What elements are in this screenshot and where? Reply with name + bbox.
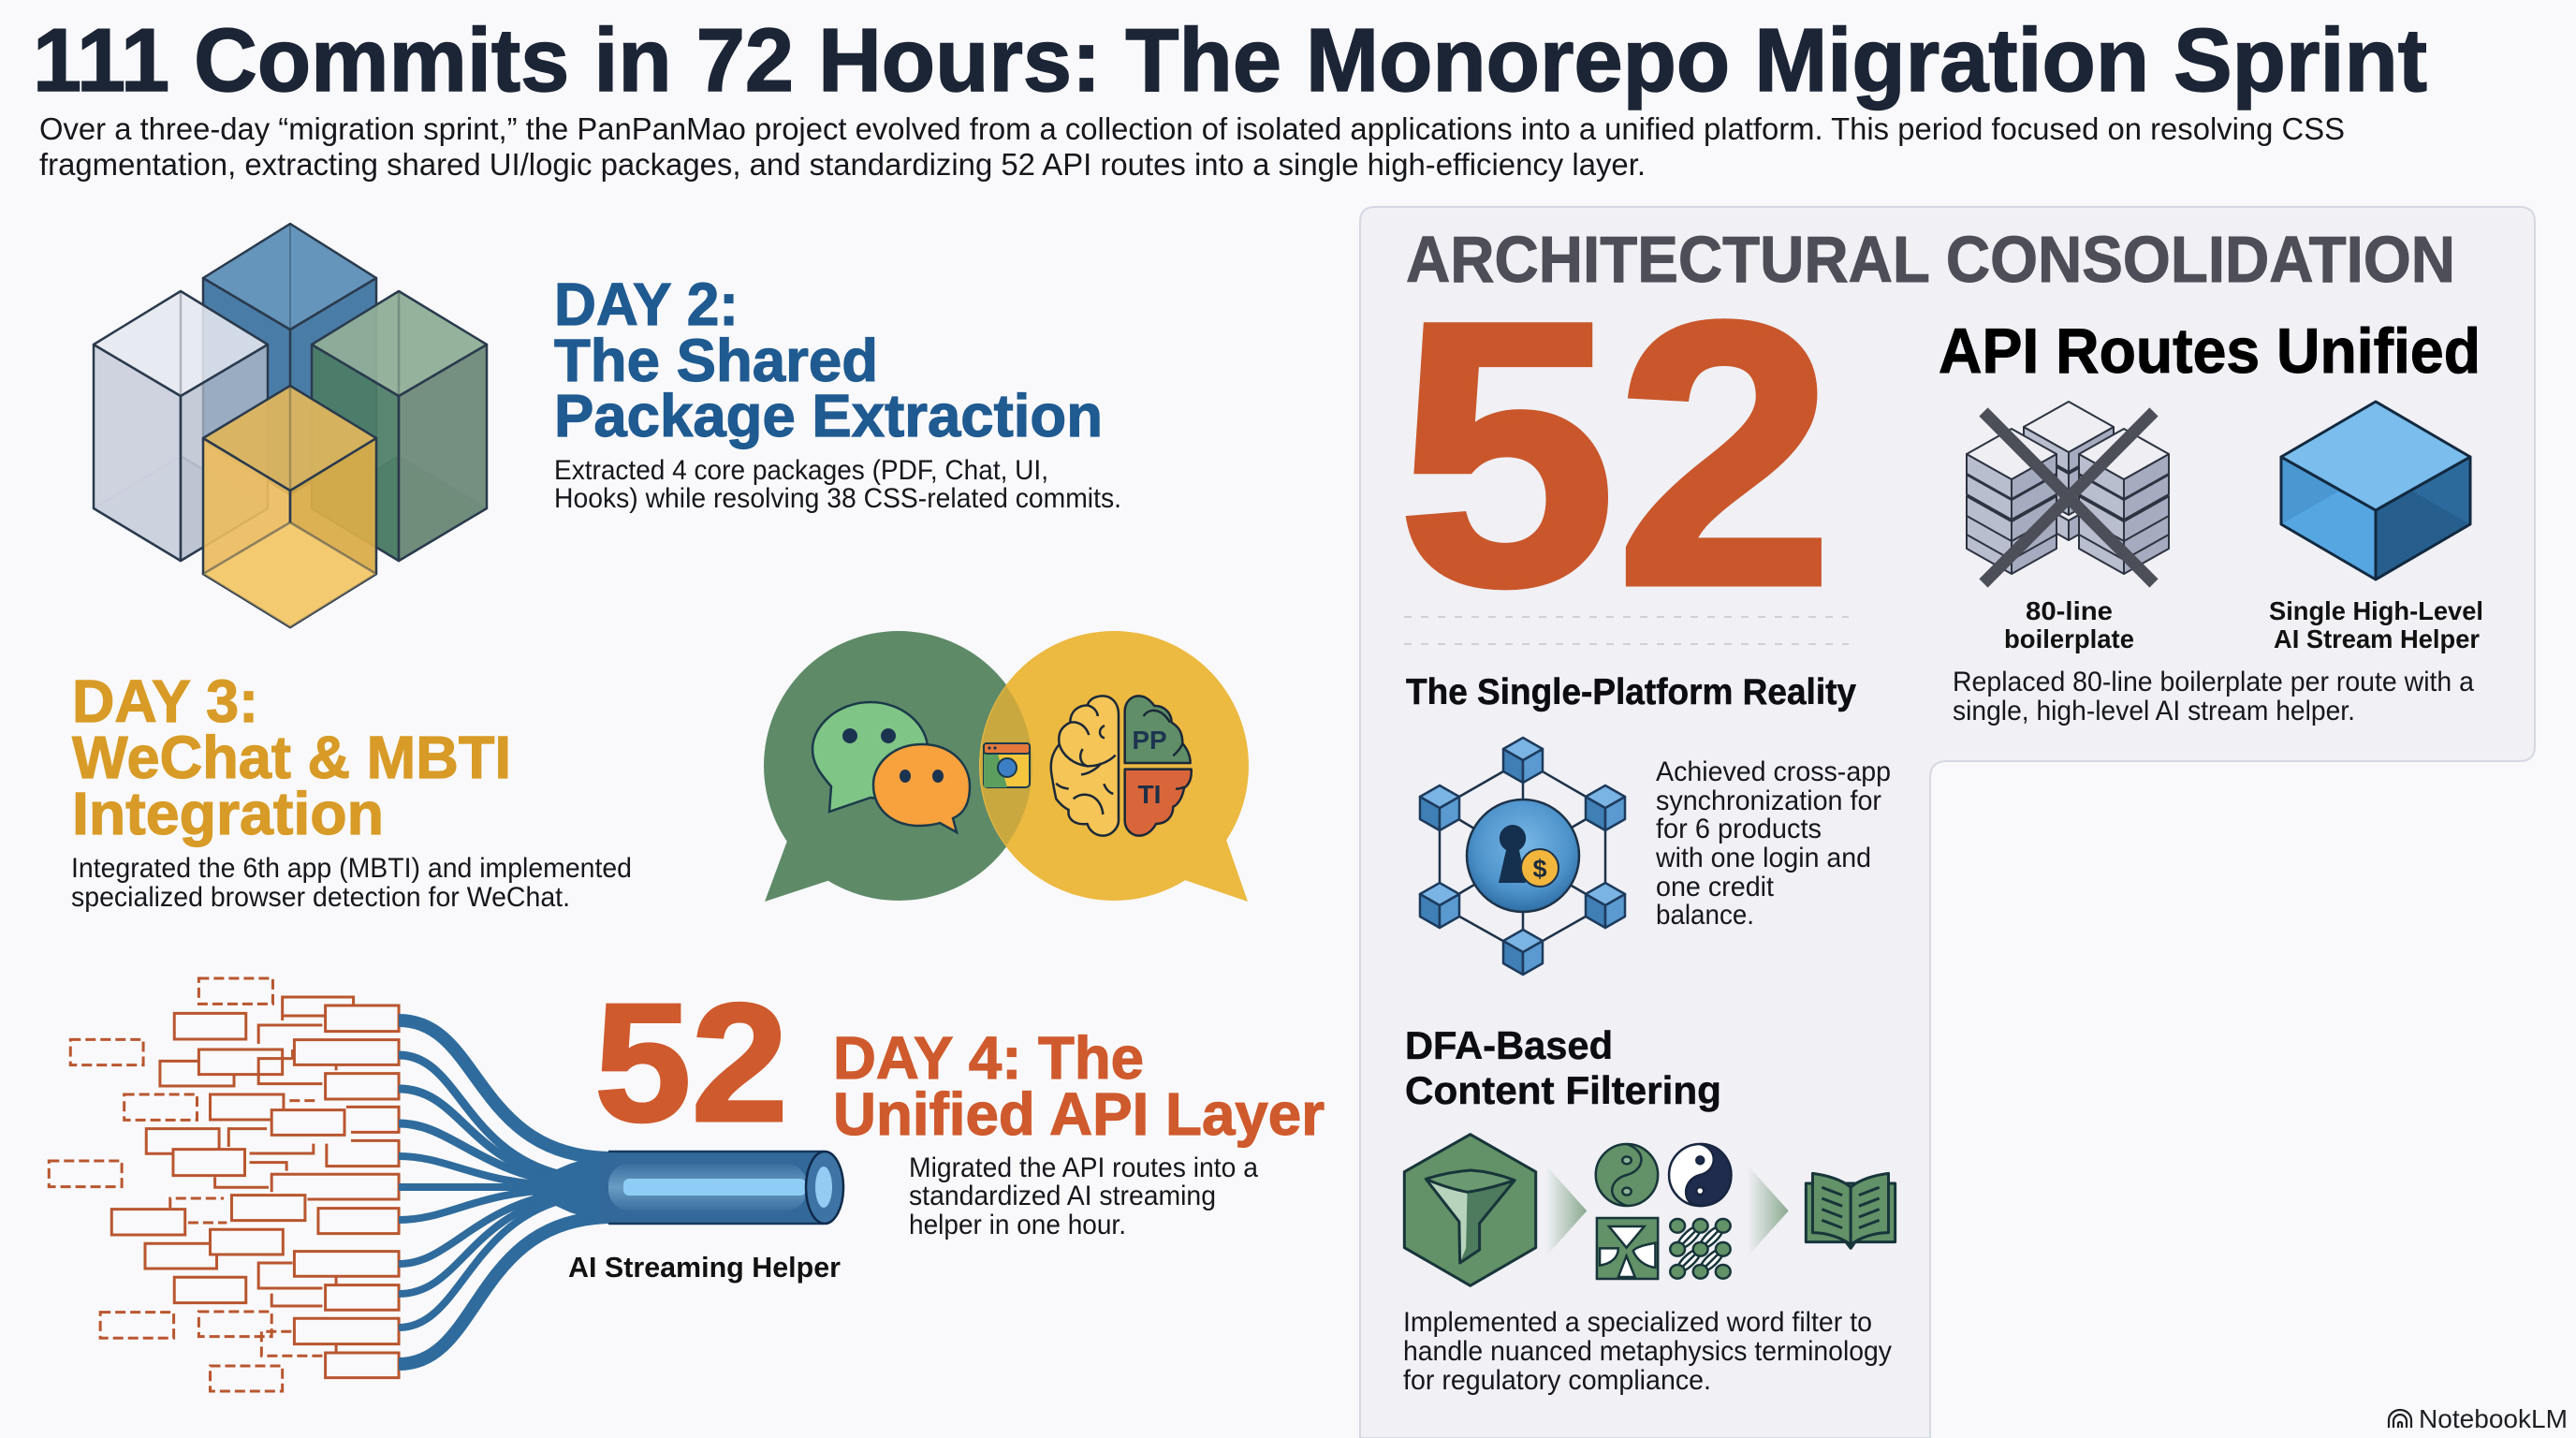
big number: 52 routes: 52: [594, 969, 788, 1157]
day 2 body text: [554, 455, 1121, 514]
title: 111 Commits in 72 Hours: The Monorepo Migration Sprint: [33, 10, 2427, 110]
day 3 body text: Integrated the 6th app (MBTI) and implemented: [71, 853, 632, 884]
intro text: fragmentation, extracting shared UI/logic packages, and standardizing 52 API routes into a single high-efficiency layer.: [39, 147, 1646, 182]
single-platform description: Achieved cross-app: [1656, 756, 1891, 787]
day 4 heading: DAY 4: The: [833, 1024, 1144, 1092]
diagram: content filter flow: [1404, 1135, 1895, 1285]
converging streams: [399, 1020, 613, 1364]
single-platform description: for 6 products: [1656, 814, 1822, 844]
icon: open book: [1806, 1173, 1895, 1248]
left stack: [1967, 429, 2056, 574]
yellow cube: [203, 386, 376, 627]
day 4 body text: standardized AI streaming: [909, 1181, 1216, 1211]
day 4 body text: Migrated the API routes into a: [909, 1152, 1258, 1183]
filtering description: [1403, 1307, 1892, 1396]
label: single high-level helper: AI Stream Helper: [2274, 624, 2480, 653]
diagram: fragmented route boxes: [49, 978, 399, 1391]
centre stack: [2024, 402, 2114, 540]
label: PP: PP: [1132, 726, 1167, 755]
icon: crossed-out boilerplate stacks: [1967, 402, 2169, 583]
icon: browser window: [984, 743, 1030, 787]
big number: 52: 52: [1398, 244, 1834, 663]
icon: node lattice: [1670, 1219, 1731, 1279]
label: 80-line boilerplate: [2004, 596, 2134, 653]
day 2 heading: Package Extraction: [554, 382, 1103, 449]
watermark: NotebookLM: NotebookLM: [2419, 1404, 2568, 1433]
day 3 heading: [72, 668, 511, 847]
label: AI Streaming Helper: AI Streaming Helper: [568, 1251, 841, 1284]
icon: shared package cubes: [94, 224, 487, 627]
pipe body: [599, 1152, 843, 1224]
filtering description: Implemented a specialized word filter to: [1403, 1307, 1872, 1338]
right stack: [2079, 429, 2169, 574]
overlap: [980, 686, 1032, 845]
coin: [1521, 849, 1559, 887]
single-platform description: [1655, 756, 1891, 931]
heading: API routes unified: API Routes Unified: [1939, 315, 2481, 387]
day 2 body text: Extracted 4 core packages (PDF, Chat, UI,: [554, 455, 1048, 486]
icon: single blue cube: [2281, 402, 2470, 580]
icon: login hub network: [1420, 738, 1625, 975]
divider lines: [1404, 617, 1849, 644]
day 3 heading: WeChat & MBTI: [72, 724, 511, 791]
day 3 body text: [71, 853, 632, 913]
day 2 heading: The Shared: [554, 327, 878, 394]
label: 80-line boilerplate: boilerplate: [2004, 624, 2134, 653]
single-platform description: one credit: [1656, 872, 1775, 902]
single-platform description: with one login and: [1655, 843, 1871, 873]
icon: hourglass tile: [1597, 1218, 1658, 1279]
label: single high-level helper: Single High-Level: [2269, 596, 2483, 625]
label: single high-level helper: [2269, 596, 2483, 653]
arrow: [1546, 1166, 1587, 1256]
icon: orange chat bubble: [873, 744, 970, 832]
routes description: Replaced 80-line boilerplate per route with a: [1953, 667, 2474, 697]
heading: DFA-based content filtering: Content Filtering: [1405, 1068, 1721, 1112]
filtering description: for regulatory compliance.: [1403, 1365, 1711, 1396]
day 4 body text: helper in one hour.: [909, 1210, 1126, 1240]
filtering description: handle nuanced metaphysics terminology: [1403, 1336, 1892, 1367]
heading: DFA-based content filtering: DFA-Based: [1405, 1023, 1613, 1067]
green cube: [312, 291, 487, 561]
diagram: streams converging into pipe: [399, 1020, 843, 1364]
routes description: [1953, 667, 2474, 726]
day 4 heading: Unified API Layer: [833, 1080, 1325, 1148]
icon: brain: [1051, 696, 1192, 836]
grey cube: [94, 291, 268, 561]
blue cube: [203, 224, 376, 494]
pipe flare: [515, 1153, 604, 1223]
single-platform description: synchronization for: [1656, 785, 1881, 816]
day 2 body text: Hooks) while resolving 38 CSS-related commits.: [554, 483, 1121, 514]
day 3 heading: Integration: [72, 780, 384, 847]
day 4 heading: [833, 1024, 1325, 1148]
day 3 heading: DAY 3:: [72, 668, 258, 735]
label: TI: TI: [1138, 780, 1161, 809]
day 3 body text: specialized browser detection for WeChat.: [71, 882, 570, 913]
central orb: [1467, 800, 1579, 912]
intro text: Over a three-day “migration sprint,” the PanPanMao project evolved from a collection of isolated applications into a unified platform. This period focused on resolving CSS: [39, 111, 2345, 146]
icon: green chat bubble: [812, 702, 928, 812]
day 2 heading: [554, 271, 1103, 449]
routes description: single, high-level AI stream helper.: [1953, 696, 2355, 726]
panel heading: architectural consolidation: ARCHITECTURAL CONSOLIDATION: [1406, 223, 2455, 296]
icon: dark yin yang: [1669, 1144, 1731, 1206]
day 4 body text: [909, 1152, 1258, 1240]
heading: DFA-based content filtering: [1405, 1023, 1721, 1112]
icon: green yin yang: [1596, 1144, 1658, 1206]
day 2 heading: DAY 2:: [554, 271, 739, 338]
icon: overlapping speech bubbles with wechat and brain: [764, 631, 1249, 902]
yellow speech bubble: [979, 631, 1249, 902]
coin: $: [1532, 855, 1547, 883]
icon: funnel hexagon: [1404, 1135, 1536, 1285]
panel: architectural consolidation background: [1360, 207, 2535, 1438]
heading: the single-platform reality: The Single-Platform Reality: [1406, 672, 1856, 712]
arrow: [1748, 1166, 1789, 1256]
single-platform description: balance.: [1656, 900, 1754, 931]
intro text: [39, 111, 2345, 182]
keyhole: [1499, 825, 1526, 883]
cross mark: [1983, 412, 2154, 583]
green speech bubble: [764, 631, 1033, 902]
label: 80-line boilerplate: 80-line: [2026, 596, 2113, 625]
